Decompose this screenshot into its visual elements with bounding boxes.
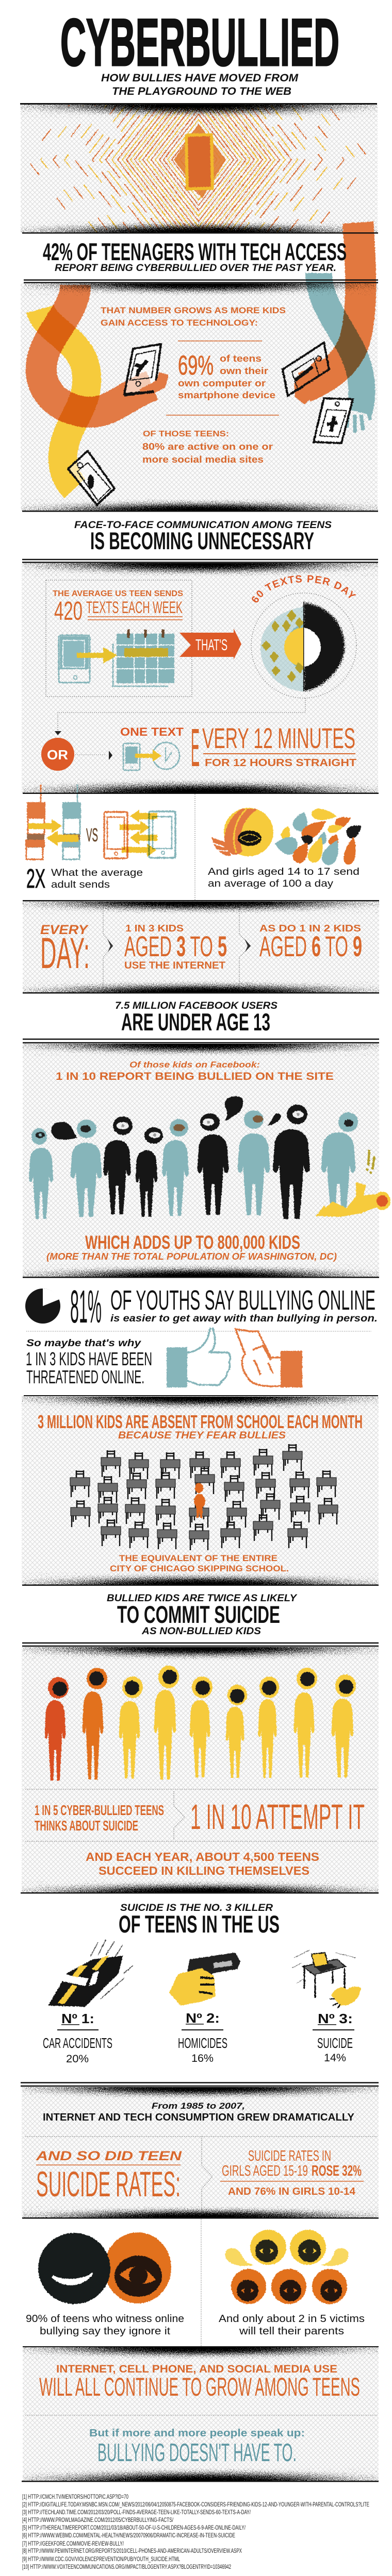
icon: desk and laptop — [292, 1950, 361, 2008]
text: number grows: THAT NUMBER GROWS AS MORE KIDS — [101, 306, 286, 315]
dotted box: 420 texts: 420 — [54, 596, 83, 625]
black half — [304, 603, 345, 691]
text: 1 in 5 — [35, 1802, 164, 1834]
brick phones — [25, 785, 81, 859]
rule — [21, 1892, 379, 1894]
illustration: reaching arms — [40, 223, 370, 488]
hand teal fingers — [347, 407, 370, 433]
text: chicago — [110, 1553, 289, 1573]
speckle — [23, 1647, 379, 1660]
references — [22, 2493, 369, 2570]
references: [4] HTTP://WWW.PROWLMAGAZINE.COM/2012/05/CYBERBULLYING-FACTS/ — [22, 2516, 173, 2523]
stat: no 2: 16% — [191, 2053, 214, 2064]
stat: aged 6 to 9: AS DO 1 IN 2 KIDS — [259, 923, 361, 934]
text: 800,000 kids: (MORE THAN THE TOTAL POPULATION OF WASHINGTON, DC) — [46, 1251, 337, 1262]
speckle — [22, 1880, 379, 1893]
text: 800,000 kids — [46, 1232, 337, 1262]
illustration: empty desks — [70, 1444, 338, 1550]
text: 4,500 teens: SUCCEED IN KILLING THEMSELVES — [99, 1864, 309, 1877]
text: 1 in 3 threatened: So maybe that's why — [26, 1338, 142, 1349]
text: girls rates: ROSE 32% — [312, 2163, 362, 2179]
speckle: top — [24, 563, 378, 577]
speckle — [23, 1044, 379, 1056]
illustration: smiling black face and orange eye — [38, 2232, 171, 2304]
text: 2x: 2X — [26, 864, 45, 894]
references: [10] HTTP://WWW.VOXTEENCOMMUNICATIONS.ORG/IMPACT/BLOGENTRY.ASPX?BLOGENTRYID=10346942 — [22, 2563, 231, 2570]
stat: 69 percent: 69% — [178, 350, 214, 381]
speckle — [23, 1572, 379, 1585]
text: 1 in 5: 1 IN 5 CYBER-BULLIED TEENS — [35, 1802, 164, 1818]
rule — [23, 992, 379, 993]
stat: of those teens — [142, 430, 273, 465]
illustration: girl head and speech drops — [211, 807, 365, 868]
text: one text every 12 minutes: E — [191, 718, 200, 778]
icon: thumbs up — [167, 1328, 230, 1387]
text: number grows: GAIN ACCESS TO TECHNOLOGY: — [101, 318, 258, 328]
panel: texting — [22, 563, 378, 793]
stat: no 2: Nº 2: — [186, 2010, 220, 2026]
panel: suicide — [22, 1647, 379, 1893]
stat: 69 percent: smartphone device — [178, 390, 275, 400]
heading: no 3 killer: SUICIDE IS THE NO. 3 KILLER — [120, 1903, 273, 1913]
panel: bullied on facebook — [23, 1044, 379, 1277]
double rule — [24, 280, 378, 282]
rule — [22, 232, 378, 234]
icon: calendar — [113, 630, 174, 686]
panel: suicide rates — [22, 2087, 379, 2218]
icon: centre phone — [174, 124, 226, 198]
speckle — [23, 980, 379, 993]
stat: aged 6 to 9: AGED 6 TO 9 — [259, 930, 362, 962]
speckle: under top rule — [21, 105, 378, 118]
text: internet grew: INTERNET AND TECH CONSUMPTION GREW DRAMATICALLY — [43, 2112, 355, 2123]
icon: phone left — [124, 344, 164, 395]
heading: commit suicide: AS NON-BULLIED KIDS — [141, 1626, 261, 1637]
text: 2x — [26, 864, 143, 894]
text: those kids: Of those kids on Facebook: — [129, 1060, 260, 1070]
stat: no 1: Nº 1: — [61, 2011, 94, 2026]
double rule — [22, 560, 378, 563]
badge: or — [41, 738, 112, 771]
heading: 42 percent: REPORT BEING CYBERBULLIED OVER THE PAST YEAR. — [55, 263, 336, 274]
text: will continue to grow: INTERNET, CELL PHONE, AND SOCIAL MEDIA USE — [56, 2363, 337, 2375]
references: [7] HTTP://GEEKFORE.COM/MOVIE-REVIEW-BULLY/ — [22, 2540, 124, 2547]
speckle — [23, 2468, 379, 2481]
text: so did suicide rates: SUICIDE RATES: — [36, 2164, 181, 2204]
text: one text every 12 minutes: ONE TEXT — [120, 725, 184, 738]
dotted frame and chevron — [25, 1789, 377, 1841]
speckle — [23, 902, 379, 914]
text: every day: DAY: — [40, 929, 90, 977]
text: girls rates — [220, 2148, 364, 2197]
text: 1 in 3 threatened: THREATENED ONLINE. — [26, 1366, 144, 1387]
stat: no 3: 14% — [324, 2052, 346, 2064]
rule — [24, 1395, 378, 1396]
heading: commit suicide — [107, 1593, 298, 1637]
stat: no 2 — [178, 2010, 227, 2064]
text: those kids — [56, 1060, 334, 1082]
stat: 81 percent youths: 81% — [70, 1281, 102, 1333]
text: 2 in 5 victims — [219, 2313, 365, 2337]
speckle: above rule — [22, 499, 378, 511]
right teal arm — [319, 273, 362, 412]
speckle — [23, 2206, 379, 2218]
eyes — [36, 1132, 45, 1138]
speech bubbles — [51, 1122, 77, 1140]
heading: face to face — [74, 520, 332, 554]
rule — [23, 2346, 379, 2347]
heading: commit suicide: BULLIED KIDS ARE TWICE AS LIKELY — [107, 1593, 298, 1604]
stat: of those teens: OF THOSE TEENS: — [143, 430, 229, 438]
stat: no 1: 20% — [66, 2053, 89, 2065]
references: [1] HTTP://CMCH.TV/MENTORS/HOTTOPIC.ASP?ID=70 — [22, 2493, 128, 2500]
arrow: that's: THAT'S — [195, 636, 227, 654]
speckle: above rule — [23, 779, 379, 793]
heading: 42 percent — [43, 238, 347, 274]
rule — [22, 511, 378, 512]
text: so did suicide rates: AND SO DID TEEN — [36, 2149, 182, 2163]
text: 90 percent ignore: bullying say they ignore it — [40, 2326, 170, 2337]
icon: teal phone — [59, 635, 90, 683]
dotted box: 420 texts: THE AVERAGE US TEEN SENDS — [53, 589, 183, 598]
speckle: below double rule — [24, 283, 378, 296]
stat: aged 3 to 5: USE THE INTERNET — [124, 960, 225, 971]
stat: 69 percent: of teens — [220, 353, 262, 364]
icon: car — [48, 1940, 133, 2007]
heading: no 3 killer: OF TEENS IN THE US — [119, 1910, 280, 1938]
text: 90 percent ignore: 90% of teens who witness online — [26, 2313, 184, 2325]
concentric diamond rays — [30, 105, 366, 232]
stat: no 1 — [43, 2011, 112, 2065]
stat: no 3: Nº 3: — [318, 2011, 353, 2026]
references: [6] HTTP://WWW.WEBMD.COM/MENTAL-HEALTH/NEWS/20070906/DRAMATIC-INCREASE-IN-TEEN-SUICIDE — [22, 2532, 235, 2539]
illustration: five heads and bubbles — [225, 2230, 349, 2304]
text: girls rates: GIRLS AGED 15-19 — [222, 2163, 308, 2179]
rule — [22, 1585, 379, 1586]
text: chicago: CITY OF CHICAGO SKIPPING SCHOOL. — [110, 1564, 289, 1573]
heading: facebook users — [115, 1001, 277, 1036]
text: 800,000 kids: WHICH ADDS UP TO 800,000 KIDS — [85, 1232, 300, 1253]
icon: gun — [169, 1953, 240, 2006]
dotted box: 420 texts: TEXTS EACH WEEK — [86, 598, 183, 617]
exclamation marks — [368, 1150, 374, 1170]
illustration: two phones comparison — [25, 785, 175, 859]
icon: small phone and clock — [123, 742, 179, 770]
stat: no 1: CAR ACCIDENTS — [43, 2035, 112, 2051]
rule — [20, 103, 377, 105]
text: one text every 12 minutes — [120, 718, 356, 778]
panel: absent from school — [22, 1396, 379, 1585]
text: 4,500 teens — [86, 1850, 319, 1877]
text: girls aged: And girls aged 14 to 17 send — [208, 867, 360, 877]
panel: phone pattern — [21, 105, 378, 233]
speckle — [23, 1264, 379, 1277]
sun and moon faces — [260, 607, 321, 691]
divider — [25, 2415, 378, 2416]
rule — [23, 900, 379, 902]
heading: facebook users: 7.5 MILLION FACEBOOK USERS — [115, 1001, 277, 1011]
text: one text every 12 minutes: FOR 12 HOURS STRAIGHT — [205, 757, 356, 769]
icon: yellow arrow — [77, 647, 117, 664]
double rule — [23, 1039, 379, 1043]
subtitle: HOW BULLIES HAVE MOVED FROM — [101, 72, 299, 84]
text: 1 in 5: THINKS ABOUT SUICIDE — [35, 1818, 138, 1834]
icon: middle finger hand — [235, 1328, 302, 1387]
subtitle — [101, 72, 299, 97]
rule — [23, 792, 379, 794]
chevron dividers — [103, 904, 251, 989]
left orange arm — [41, 285, 152, 412]
text: so did suicide rates — [36, 2149, 182, 2204]
divider — [26, 1331, 371, 1332]
stat: no 3: SUICIDE — [317, 2035, 353, 2051]
text: girls rates: AND 76% IN GIRLS 10-14 — [228, 2186, 356, 2197]
divider — [201, 2219, 202, 2346]
panel: every day — [23, 901, 379, 993]
double rule — [22, 1643, 379, 1646]
stat: of those teens: 80% are active on one or — [142, 442, 273, 452]
panel: speak up — [23, 2347, 379, 2481]
stat: no 2: HOMICIDES — [178, 2035, 227, 2051]
right orange arm — [304, 223, 361, 387]
text: 2x: What the average — [51, 868, 143, 878]
icon: lone orange kid at desk — [194, 1483, 205, 1518]
text: every day: EVERY — [40, 923, 89, 937]
double rule — [21, 2082, 379, 2086]
left yellow arm — [40, 309, 87, 488]
divider — [194, 794, 195, 900]
icon: phone right — [283, 343, 329, 396]
stat: 69 percent: own their — [220, 366, 268, 376]
icon: phone yellow hand — [68, 451, 115, 505]
rule — [22, 2217, 379, 2218]
speckle: above second rule — [21, 221, 378, 233]
kid heads — [31, 1128, 47, 1145]
stat: 69 percent: own computer or — [178, 378, 266, 388]
text: every day — [40, 923, 90, 977]
text: 2 in 5 victims: And only about 2 in 5 victims — [219, 2313, 365, 2325]
rule — [22, 2481, 379, 2482]
subtitle: THE PLAYGROUND TO THE WEB — [112, 86, 291, 97]
references: [8] HTTP://WWW.PEWINTERNET.ORG/REPORTS/2010/CELL-PHONES-AND-AMERICAN-ADULTS/OVERVIEW.ASPX — [22, 2547, 242, 2554]
infographic: VS — [86, 824, 98, 845]
pie chart: 81 percent — [25, 1289, 60, 1324]
heading: facebook users: ARE UNDER AGE 13 — [121, 1008, 270, 1036]
text: 1 in 3 threatened — [26, 1338, 152, 1387]
heading: no 3 killer — [119, 1903, 280, 1938]
arrow: that's — [179, 629, 241, 659]
icon: phone teal hand — [314, 398, 353, 443]
dotted box: 420 texts — [46, 580, 192, 697]
references: [5] HTTP://THEREALTIMEREPORT.COM/2011/03/18/ABOUT-50-OF-U-S-CHILDREN-AGES-6-9-ARE-ONLINE-DAILY/ — [22, 2524, 246, 2531]
falling yellow kid — [316, 1182, 381, 1217]
heading: commit suicide: TO COMMIT SUICIDE — [117, 1601, 280, 1628]
speckle — [23, 2347, 379, 2360]
heading: face to face: FACE-TO-FACE COMMUNICATION AMONG TEENS — [74, 520, 332, 531]
text: chicago: THE EQUIVALENT OF THE ENTIRE — [119, 1553, 277, 1563]
panel: tech access — [21, 283, 378, 511]
references: [9] HTTP://WWW.CDC.GOV/VIOLENCEPREVENTION/PUB/YOUTH_SUICIDE.HTML — [22, 2555, 180, 2563]
stat: no 3 — [313, 2011, 354, 2064]
smart phones — [104, 812, 127, 858]
badge: or: OR — [47, 747, 68, 762]
stat: aged 3 to 5: AGED 3 TO 5 — [124, 930, 227, 962]
text: 2 in 5 victims: will tell their parents — [239, 2326, 344, 2337]
stat: 81 percent youths — [70, 1281, 378, 1333]
text: 3 million kids: BECAUSE THEY FEAR BULLIES — [118, 1430, 286, 1441]
text: internet grew: From 1985 to 2007, — [152, 2101, 245, 2111]
dotted frame and chevron — [25, 2137, 378, 2215]
text: 1 in 3 threatened: 1 IN 3 KIDS HAVE BEEN — [26, 1348, 152, 1369]
text: 4,500 teens: AND EACH YEAR, ABOUT 4,500 TEENS — [86, 1850, 319, 1863]
stat: aged 3 to 5: 1 IN 3 KIDS — [125, 923, 184, 934]
kid bodies — [29, 1148, 53, 1219]
text: girls aged — [208, 867, 360, 889]
dotted connector — [55, 698, 305, 735]
text: closing message: But if more and more people speak up: — [89, 2428, 305, 2439]
illustration: row of kids — [45, 1666, 356, 1781]
references: [3] HTTP://TECHLAND.TIME.COM/2012/03/20/POLL-FINDS-AVERAGE-TEEN-LIKE-TOTALLY-SENDS-60-TEXTS-A-DAY/ — [22, 2509, 251, 2516]
chart: sun and moon — [251, 575, 357, 699]
stat: 69 percent — [166, 341, 279, 415]
text: 90 percent ignore — [26, 2313, 184, 2337]
text: closing message — [89, 2428, 305, 2467]
text: number grows — [101, 306, 286, 328]
text: 3 million kids — [38, 1411, 363, 1441]
illustration: crowd of kids — [29, 1096, 390, 1219]
speckle — [22, 1397, 379, 1410]
hand right orange — [294, 355, 330, 404]
curved label: 60 TEXTS PER DAY — [252, 575, 356, 603]
text: 2x: adult sends — [51, 879, 110, 890]
text: those kids: 1 IN 10 REPORT BEING BULLIED ON THE SITE — [56, 1071, 334, 1082]
speckle — [23, 2087, 379, 2099]
stat: aged 3 to 5 — [124, 923, 227, 971]
stat: 81 percent youths: is easier to get away with than bullying in person. — [110, 1313, 378, 1324]
text: girls aged: an average of 100 a day — [208, 878, 334, 889]
text: internet grew — [43, 2101, 355, 2123]
text: girls rates: SUICIDE RATES IN — [248, 2148, 331, 2164]
stat: of those teens: more social media sites — [142, 454, 264, 465]
rule — [23, 1277, 379, 1278]
